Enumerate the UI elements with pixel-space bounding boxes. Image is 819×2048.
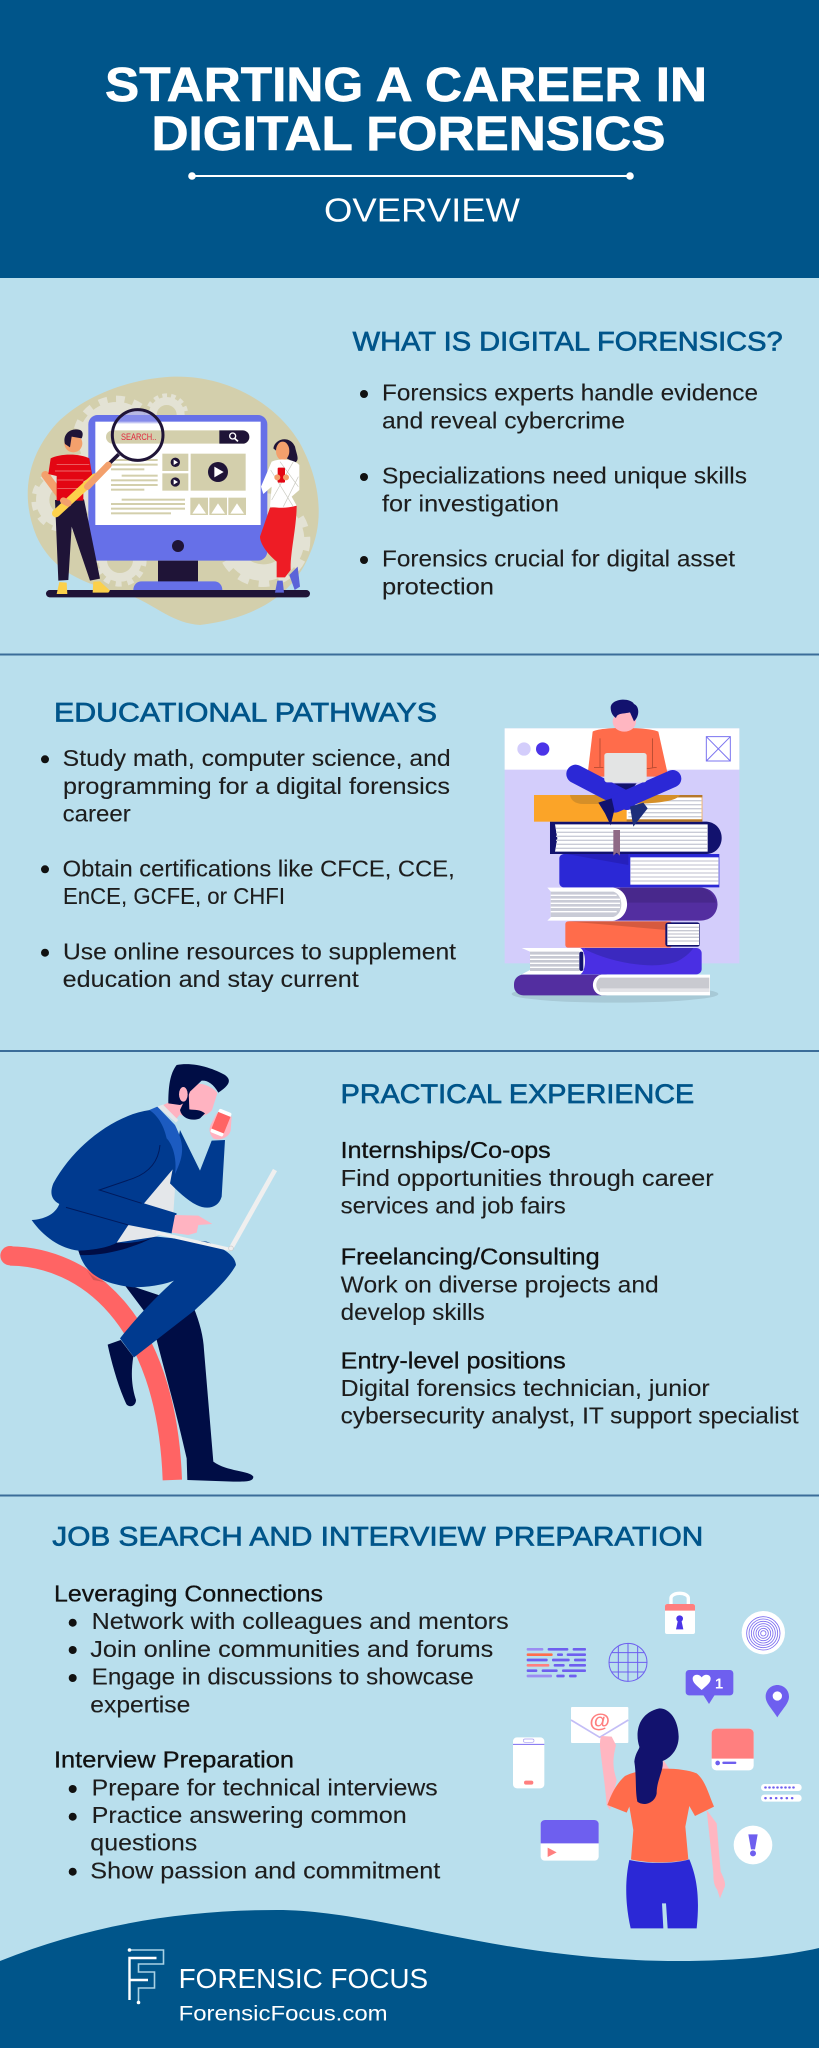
- list: interview preparation: Interview Preparation: [54, 1747, 294, 1773]
- list: interview preparation: questions: [90, 1830, 197, 1856]
- panel: practical experience: [0, 1064, 799, 1482]
- icon: coral card: [712, 1729, 754, 1770]
- bullet list: programming for a digital forensics: [63, 773, 450, 799]
- bullet list: Specializations need unique skills: [382, 462, 747, 488]
- bullet list: Study math, computer science, and: [63, 745, 451, 771]
- brand name: FORENSIC FOCUS: [179, 1963, 428, 1994]
- subtitle: OVERVIEW: [324, 192, 520, 230]
- bullet list: for investigation: [382, 490, 559, 516]
- list: interview preparation: Prepare for technical interviews: [92, 1774, 438, 1800]
- bullet list: and reveal cybercrime: [382, 407, 625, 433]
- bullet list: EnCE, GCFE, or CHFI: [63, 883, 285, 909]
- icon: video card: [541, 1820, 599, 1861]
- illustration: monitor search with two people: [28, 377, 319, 625]
- figure: woman from behind: [600, 1708, 725, 1928]
- entry: freelancing: Freelancing/Consulting: [341, 1244, 600, 1270]
- bullet list: career: [63, 800, 131, 826]
- section dividers: [0, 654, 819, 1496]
- bullet list: [41, 745, 457, 992]
- illustration: woman with floating digital icons: [513, 1593, 802, 1928]
- list: leveraging connections: Engage in discussions to showcase: [92, 1664, 474, 1690]
- icon: map pin: [766, 1685, 789, 1717]
- bullet list: Forensics crucial for digital asset: [382, 545, 736, 571]
- panel: job search and interview preparation: [52, 1522, 802, 1928]
- entry: internships: [341, 1137, 714, 1219]
- entry: entry-level positions: [341, 1347, 799, 1429]
- heading: EDUCATIONAL PATHWAYS: [54, 698, 437, 728]
- title divider with end dots: [188, 172, 634, 180]
- icon: email envelope: [571, 1707, 628, 1743]
- entry: internships: Find opportunities through career: [341, 1165, 714, 1191]
- title: STARTING A CAREER IN: [105, 59, 707, 112]
- website: ForensicFocus.com: [179, 2003, 388, 2026]
- heading: PRACTICAL EXPERIENCE: [341, 1079, 694, 1109]
- list: interview preparation: [54, 1747, 441, 1883]
- entry: freelancing: [341, 1244, 659, 1325]
- illustration: man with phone and laptop on coral arch: [0, 1064, 275, 1482]
- list: leveraging connections: expertise: [90, 1691, 190, 1717]
- footer wave band: [0, 1910, 819, 2048]
- icon: padlock: [665, 1593, 695, 1634]
- bullet list: protection: [382, 573, 494, 599]
- illustration: monitor search with two people: SEARCH..: [121, 432, 156, 442]
- heading: WHAT IS DIGITAL FORENSICS?: [353, 327, 783, 357]
- logo mark: [128, 1948, 164, 2004]
- list: leveraging connections: Join online communities and forums: [90, 1636, 493, 1662]
- icon: password fields: [761, 1784, 802, 1802]
- entry: freelancing: Work on diverse projects and: [341, 1271, 659, 1297]
- illustration: person on stack of books: [505, 700, 739, 1003]
- entry: internships: Internships/Co-ops: [341, 1137, 551, 1163]
- entry: internships: services and job fairs: [341, 1193, 566, 1219]
- list: leveraging connections: [54, 1581, 509, 1717]
- heading: JOB SEARCH AND INTERVIEW PREPARATION: [52, 1522, 703, 1552]
- bullet list: Use online resources to supplement: [63, 938, 457, 964]
- panel: educational pathways: [41, 698, 739, 1003]
- entry: entry-level positions: cybersecurity analyst, IT support specialist: [341, 1403, 799, 1429]
- bullet list: Obtain certifications like CFCE, CCE,: [63, 856, 455, 882]
- panel: what is digital forensics: [28, 327, 783, 625]
- icon: fingerprint: [742, 1611, 785, 1654]
- icon: like notification: 1: [715, 1676, 723, 1692]
- header banner: [0, 0, 819, 278]
- bullet list: Forensics experts handle evidence: [382, 380, 758, 406]
- title: [105, 59, 707, 161]
- list: interview preparation: Show passion and commitment: [90, 1857, 441, 1883]
- entry: entry-level positions: Entry-level positions: [341, 1347, 566, 1373]
- bullet list: education and stay current: [63, 966, 359, 992]
- entry: freelancing: develop skills: [341, 1299, 485, 1325]
- list: leveraging connections: Leveraging Connections: [54, 1581, 323, 1607]
- title: DIGITAL FORENSICS: [152, 108, 666, 161]
- icon: email envelope: @: [589, 1709, 610, 1732]
- bullet list: [360, 380, 758, 599]
- list: interview preparation: Practice answering common: [92, 1802, 407, 1828]
- icon: exclamation badge: [734, 1826, 772, 1864]
- list: leveraging connections: Network with colleagues and mentors: [92, 1608, 509, 1634]
- icon: like notification: [686, 1670, 733, 1704]
- icon: globe grid: [609, 1643, 647, 1681]
- icon: smartphone: [513, 1737, 544, 1788]
- entry: entry-level positions: Digital forensics technician, junior: [341, 1375, 710, 1401]
- icon: code lines: [527, 1648, 586, 1677]
